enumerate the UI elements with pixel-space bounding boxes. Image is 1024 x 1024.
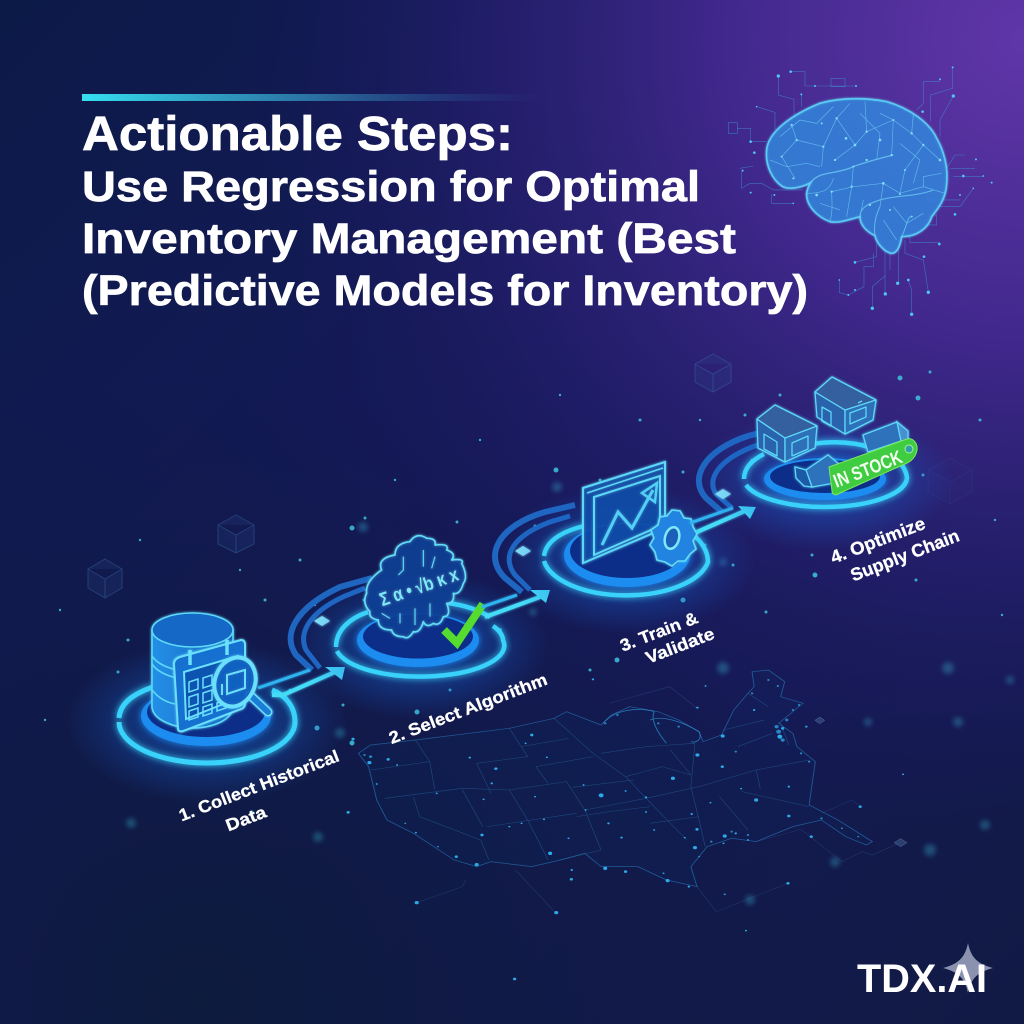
icon: gear [650, 510, 697, 566]
brain circuit traces [728, 67, 983, 314]
in stock tag [829, 439, 917, 495]
icon: calendar [174, 640, 245, 731]
map small diamonds [815, 717, 907, 847]
glow [290, 571, 550, 719]
arrow line [690, 508, 747, 532]
map state lines [371, 693, 809, 860]
label: step 4: Supply Chain [848, 525, 962, 585]
icon: magnifier [208, 652, 268, 712]
panel: step 2 select algorithm [290, 536, 550, 748]
title line 3: Inventory Management (Best [82, 215, 736, 263]
cube left [88, 559, 122, 598]
icon: chart monitor [583, 462, 665, 563]
diamond marker [515, 546, 531, 556]
panel: step 3 train and validate [496, 462, 756, 668]
icon: truck rear [863, 422, 908, 452]
map outline [358, 670, 872, 887]
panel: step 1 collect historical data [67, 613, 347, 835]
logo: TDX.AI [857, 943, 993, 1001]
title line 4: (Predictive Models for Inventory) [82, 267, 808, 315]
platform rings [336, 603, 504, 677]
logo star [943, 943, 993, 993]
map city nodes [347, 678, 904, 980]
label: step 3: 3. Train & [617, 608, 701, 655]
panel: step 4 optimize supply chain [695, 377, 962, 585]
connector arcs [699, 430, 772, 512]
title line 2: Use Regression for Optimal [82, 163, 700, 211]
brain lobes [365, 536, 465, 638]
glow [496, 486, 756, 634]
tag label: IN STOCK [831, 447, 906, 493]
icon: algorithm brain: Σ α • √b κ x [377, 564, 462, 611]
brain silhouette [766, 99, 947, 253]
logo text: TDX.AI [857, 957, 987, 1001]
map coast clusters [363, 679, 859, 857]
connector arcs [495, 505, 575, 592]
tag hole [905, 445, 913, 453]
platform rings [744, 442, 907, 507]
brain nodes [781, 117, 941, 218]
diamond marker [715, 489, 731, 499]
brain circuit nodes [742, 66, 993, 316]
icon: network brain [728, 66, 993, 316]
arrow: step 2 to 3 [482, 505, 575, 617]
label: step 2: 2. Select Algorithm [386, 670, 550, 748]
arrow: step 3 to 4 [690, 430, 772, 532]
icon: warehouse back [815, 377, 876, 434]
title [82, 108, 808, 315]
star particles [44, 370, 1003, 814]
title line 1: Actionable Steps: [82, 108, 513, 161]
connector arcs [291, 578, 372, 670]
map great lakes [603, 709, 700, 743]
floating cubes [88, 354, 972, 598]
platform rings [544, 523, 708, 595]
icon: green check [444, 604, 483, 643]
arrow: step 1 to 2 [258, 578, 372, 695]
cube upper [695, 354, 731, 392]
brain fold lines [770, 102, 945, 240]
icon: truck front [795, 455, 840, 487]
accent bar [82, 94, 547, 101]
glow [695, 410, 955, 550]
arrow line [482, 595, 540, 617]
faint blurred particles [126, 482, 1014, 905]
label: step 1: Data [223, 802, 270, 835]
label: step 3: Validate [643, 624, 717, 668]
label: step 4: 4. Optimize [828, 513, 928, 568]
cube right [928, 458, 972, 504]
glow [67, 640, 347, 804]
diamond marker [314, 616, 330, 626]
cube middle [218, 515, 254, 553]
platform rings [119, 686, 295, 763]
icon: algorithm brain [365, 536, 465, 638]
label: step 1: 1. Collect Historical [176, 747, 342, 825]
map: United States network [347, 670, 907, 980]
arrow line [258, 670, 335, 695]
label: step 3 [617, 608, 717, 668]
icon: warehouse front [757, 405, 817, 462]
icon: database [152, 613, 233, 728]
map callout leaders [417, 687, 900, 913]
